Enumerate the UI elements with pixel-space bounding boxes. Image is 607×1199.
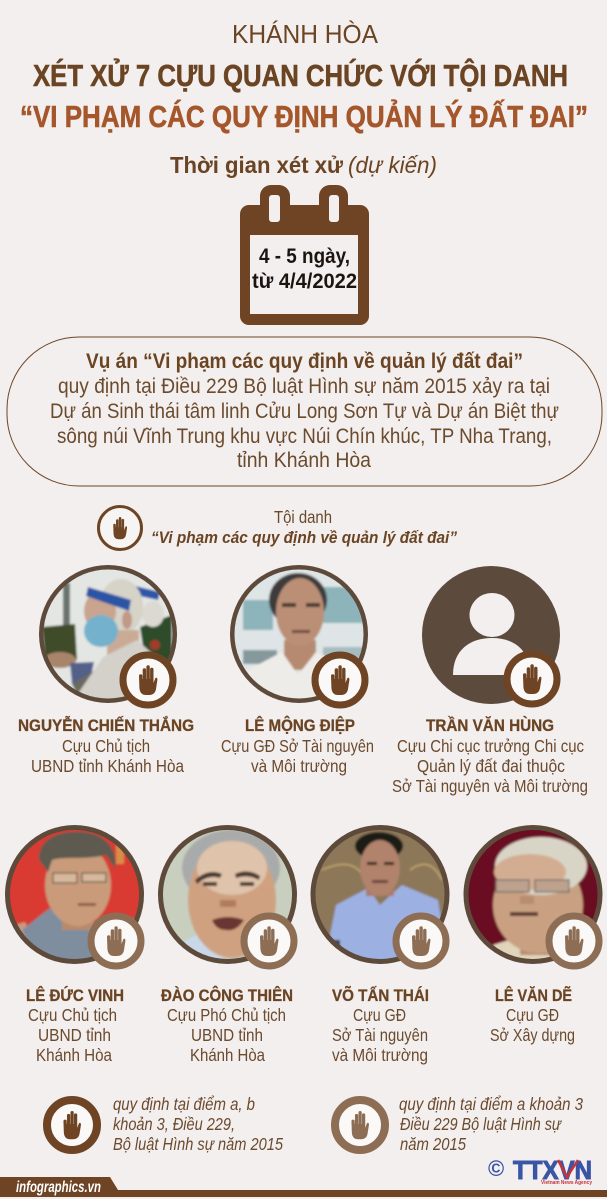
icon: dark hand (47, 1100, 97, 1150)
legend text: khoản 3, Điều 229, (113, 1114, 235, 1134)
portrait photo (230, 565, 370, 710)
badge: hand (123, 655, 173, 705)
subheading: trial time: Thời gian xét xử (170, 152, 343, 178)
person: Lê Văn Dẽ (464, 825, 604, 1045)
agency tagline: Vietnam News Agency (541, 1180, 593, 1186)
icon: calendar with trial date (240, 185, 369, 325)
icon: hand in ring (98, 506, 142, 550)
role: Cựu Chủ tịch (28, 1005, 117, 1025)
panel text line: tỉnh Khánh Hòa (237, 449, 371, 472)
role: Cựu GĐ (506, 1005, 559, 1025)
role: Sở Xây dựng (490, 1025, 575, 1045)
name: TRẦN VĂN HÙNG (426, 716, 554, 735)
badge: hand (507, 654, 557, 704)
role: Cựu Phó Chủ tịch (167, 1005, 286, 1025)
icon: light hand (335, 1100, 385, 1150)
role: UBND tỉnh Khánh Hòa (31, 756, 184, 776)
role: Cựu Chủ tịch (62, 736, 150, 756)
portrait photo (5, 825, 145, 965)
role: Khánh Hòa (190, 1045, 265, 1065)
legend label: Tội danh (274, 507, 332, 527)
calendar text: 4 - 5 ngày, (259, 245, 350, 268)
panel text line: Dự án Sinh thái tâm linh Cửu Long Sơn Tự và Dự án Biệt thự (50, 400, 559, 423)
person: Võ Tấn Thái (310, 825, 451, 1065)
role: Khánh Hòa (36, 1045, 112, 1065)
panel heading: Vụ án “Vi phạm các quy định về quản lý đất đai” (86, 350, 523, 373)
subheading: trial time (170, 152, 437, 178)
person: Đào Công Thiên (158, 825, 298, 1065)
portrait photo (310, 825, 451, 965)
role: Sở Tài nguyên (332, 1025, 428, 1045)
person: Lê Mộng Điệp (221, 565, 374, 776)
badge: hand (244, 916, 294, 966)
legend text: quy định tại điểm a, b (113, 1094, 255, 1114)
role: UBND tỉnh (38, 1025, 111, 1045)
title: province: KHÁNH HÒA (232, 19, 379, 49)
panel text line: quy định tại Điều 229 Bộ luật Hình sự năm 2015 xảy ra tại (58, 375, 550, 398)
title block (20, 19, 588, 134)
name: LÊ VĂN DẼ (495, 985, 572, 1005)
calendar date: từ 4/4/2022 (252, 270, 357, 293)
portrait photo (464, 825, 604, 965)
legend text: Bộ luật Hình sự năm 2015 (113, 1134, 283, 1154)
badge: hand (315, 655, 365, 705)
role: Quản lý đất đai thuộc (417, 756, 565, 776)
person: Lê Đức Vinh (5, 825, 145, 1065)
legend: dark hand, points a and b (47, 1094, 283, 1154)
legend text: Điều 229 Bộ luật Hình sự (400, 1114, 563, 1134)
badge: hand (91, 916, 141, 966)
role: và Môi trường (332, 1045, 428, 1065)
legend text: quy định tại điểm a khoản 3 (399, 1094, 583, 1114)
role: UBND tỉnh (191, 1025, 263, 1045)
panel: case description (7, 337, 602, 486)
panel text line: sông núi Vĩnh Trung khu vực Núi Chín khúc, TP Nha Trang, (57, 425, 552, 448)
portrait photo (158, 825, 298, 965)
role: và Môi trường (251, 756, 347, 776)
name: VÕ TẤN THÁI (332, 985, 429, 1005)
legend text: năm 2015 (400, 1134, 466, 1154)
role: Cựu GĐ Sở Tài nguyên (221, 736, 374, 756)
legend: light hand, point a (335, 1094, 583, 1154)
charge legend (98, 506, 457, 550)
icon: avatar placeholder (422, 566, 560, 704)
copyright mark: © (488, 1156, 504, 1181)
role: Cựu GĐ (353, 1005, 406, 1025)
footer bar (0, 1177, 607, 1197)
logo: TTXVN (488, 1155, 593, 1186)
name: LÊ ĐỨC VINH (26, 986, 124, 1005)
badge: hand (396, 916, 446, 966)
name: ĐÀO CÔNG THIÊN (161, 986, 293, 1005)
portrait photo (39, 565, 177, 710)
person: Nguyễn Chiến Thắng (18, 565, 194, 776)
badge: hand (549, 916, 599, 966)
person: Trần Văn Hùng (392, 566, 588, 796)
subheading: trial time: (dự kiến) (348, 152, 437, 178)
name: NGUYỄN CHIẾN THẮNG (18, 716, 194, 735)
agency name: TTXVN (513, 1155, 592, 1185)
name: LÊ MỘNG ĐIỆP (245, 716, 355, 735)
legend charge: “Vi phạm các quy định về quản lý đất đai” (151, 528, 457, 547)
footer site name: infographics.vn (16, 1179, 101, 1196)
